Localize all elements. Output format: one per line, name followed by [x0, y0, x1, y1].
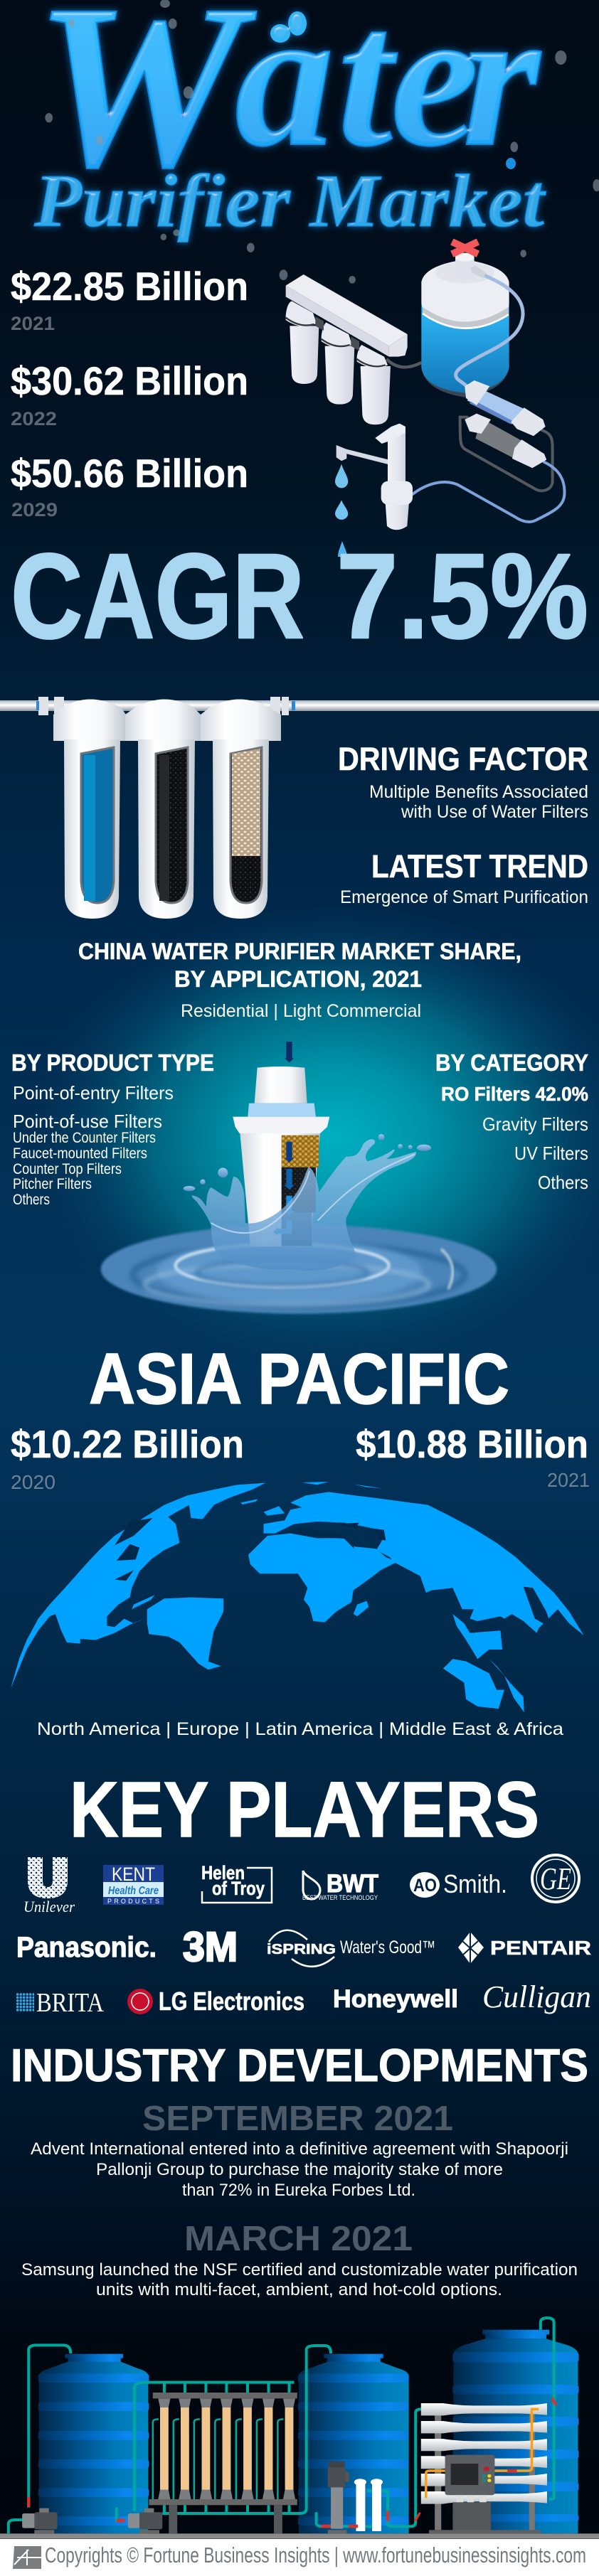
- logo: A.O. Smith: Smith.: [443, 1869, 507, 1898]
- driving factor: with Use of Water Filters: [401, 802, 588, 822]
- by product type list: BY PRODUCT TYPE: [11, 1049, 214, 1076]
- logo: A.O. Smith: [410, 1869, 507, 1898]
- by category list: Gravity Filters: [482, 1113, 588, 1135]
- driving factor: [338, 741, 588, 822]
- china market share heading: Residential | Light Commercial: [181, 1001, 421, 1021]
- development: September 2021: Advent International entered into a definitive agreement with Shapoorji: [31, 2139, 568, 2159]
- title: Water Purifier Market: [33, 0, 599, 284]
- filter heads: [53, 700, 281, 741]
- footer: [0, 2539, 599, 2576]
- logo: Kent Health Care Products: Health Care: [108, 1885, 159, 1897]
- china market share heading: [78, 939, 521, 1021]
- logo: BWT: BEST WATER TECHNOLOGY: [302, 1894, 378, 1901]
- stat: 2022 market size: 2022: [11, 408, 57, 429]
- red valves: [27, 2396, 558, 2528]
- storage tank: [421, 260, 509, 397]
- logo: A.O. Smith: AO: [413, 1876, 437, 1896]
- falling drops: [335, 464, 348, 520]
- water ripple and splash with cartridge: [101, 1042, 497, 1314]
- teal pipework: [9, 2318, 554, 2533]
- logo: Helen of Troy: [201, 1862, 272, 1903]
- stat: 2021 market size: $22.85 Billion: [11, 264, 248, 309]
- mounting bracket: [286, 274, 408, 357]
- three filter tubes: [286, 301, 421, 424]
- stat: 2021 market size: [11, 264, 248, 334]
- development: March 2021: [21, 2220, 578, 2299]
- logo: Pentair: [458, 1932, 591, 1964]
- seas and lakes: [115, 1518, 552, 1633]
- membrane rack: [149, 2393, 297, 2533]
- hoses: [413, 276, 564, 522]
- stat: 2029 market size: [11, 451, 248, 520]
- logo: LG Electronics: LG Electronics: [159, 1987, 304, 2016]
- control panel: [429, 2455, 541, 2533]
- pump left: [22, 2508, 58, 2533]
- logo: iSpring: [267, 1930, 435, 1967]
- by category list: Others: [538, 1172, 588, 1193]
- faucet: [336, 424, 413, 530]
- by product type list: Under the Counter Filters: [13, 1130, 156, 1146]
- logo: Honeywell: Honeywell: [333, 1985, 458, 2013]
- drop on CAGR seven: [338, 541, 347, 557]
- china market share heading: BY APPLICATION, 2021: [174, 966, 422, 992]
- ground: [0, 2533, 599, 2539]
- logo: GE: [532, 1855, 579, 1902]
- driving factor: Multiple Benefits Associated: [369, 782, 588, 802]
- logo: GE: GE: [540, 1861, 571, 1896]
- tank neck: [455, 253, 487, 279]
- red valve: [452, 242, 478, 254]
- asia pacific 2021 value: [356, 1422, 590, 1491]
- filter tube: gravel and carbon: [213, 739, 269, 919]
- asia pacific 2020 value: $10.22 Billion: [11, 1422, 244, 1466]
- illustration: industrial water treatment plant: [0, 2318, 599, 2539]
- development: March 2021: units with multi-facet, ambient, and hot-cold options.: [96, 2280, 502, 2299]
- asia pacific heading: ASIA PACIFIC: [89, 1340, 509, 1419]
- by product type list: [11, 1049, 214, 1208]
- logo: iSpring: Water's Good™: [340, 1938, 435, 1957]
- footer logo: [13, 2546, 41, 2569]
- asia pacific 2020 value: [11, 1422, 244, 1493]
- logo: Culligan: Culligan: [482, 1979, 591, 2014]
- logo: BWT: [302, 1870, 378, 1901]
- asia pacific 2021 value: 2021: [547, 1469, 590, 1491]
- by product type list: Counter Top Filters: [13, 1161, 122, 1177]
- latest trend: [340, 848, 588, 907]
- inline cartridges: [465, 380, 546, 468]
- asia pacific 2020 value: 2020: [11, 1471, 55, 1493]
- stat: 2029 market size: $50.66 Billion: [11, 451, 248, 496]
- by category list: [435, 1049, 588, 1193]
- key players heading: KEY PLAYERS: [70, 1766, 539, 1854]
- logo: Helen of Troy: of Troy: [212, 1878, 265, 1899]
- development: March 2021: Samsung launched the NSF certified and customizable water purification: [21, 2260, 578, 2280]
- logo: Unilever: Unilever: [23, 1898, 75, 1915]
- latest trend: Emergence of Smart Purification: [340, 887, 588, 907]
- title line: Purifier Market: Purifier Market: [33, 159, 547, 242]
- logo: Kent Health Care Products: KENT: [112, 1864, 155, 1885]
- development: September 2021: SEPTEMBER 2021: [142, 2100, 453, 2138]
- by product type list: Others: [13, 1192, 50, 1208]
- development: September 2021: Pallonji Group to purchase the majority stake of more: [96, 2160, 503, 2179]
- logo: Helen of Troy: Helen: [201, 1862, 245, 1883]
- horizontal water pipe: [0, 697, 599, 715]
- logo: Pentair: PENTAIR: [490, 1937, 591, 1959]
- white filter pair: [354, 2479, 383, 2531]
- logo: Unilever: [23, 1857, 75, 1915]
- illustration: home RO water purifier: [286, 242, 564, 530]
- development: September 2021: than 72% in Eureka Forbes Ltd.: [182, 2181, 415, 2200]
- filter tube: blue sediment: [64, 739, 120, 919]
- logo: Kent Health Care Products: PRODUCTS: [107, 1898, 159, 1905]
- thin side pipes: [153, 2419, 283, 2499]
- reverse osmosis rack: [421, 2403, 547, 2530]
- china market share heading: CHINA WATER PURIFIER MARKET SHARE,: [78, 939, 521, 964]
- splash highlight: [211, 1154, 415, 1233]
- stat: 2021 market size: 2021: [11, 313, 55, 334]
- logo: 3M: 3M: [183, 1924, 238, 1970]
- development: September 2021: [31, 2100, 568, 2200]
- stat: 2022 market size: $30.62 Billion: [11, 358, 248, 403]
- by product type list: Pitcher Filters: [13, 1176, 92, 1192]
- CAGR headline: CAGR: [11, 529, 304, 664]
- by category list: UV Filters: [514, 1143, 588, 1164]
- pump right: [128, 2508, 162, 2533]
- logo: Kent Health Care Products: [103, 1864, 164, 1905]
- by product type list: Point-of-entry Filters: [13, 1082, 174, 1103]
- regions list: North America | Europe | Latin America | Middle East & Africa: [37, 1719, 563, 1739]
- stat: 2022 market size: [11, 358, 248, 429]
- logo: iSpring: iSPRING: [267, 1942, 336, 1957]
- stat: 2029 market size: 2029: [11, 499, 58, 520]
- development: March 2021: MARCH 2021: [184, 2220, 413, 2258]
- logo: LG Electronics: [127, 1987, 304, 2016]
- key players logos: [16, 1855, 591, 2018]
- water splash crown: [184, 1134, 431, 1271]
- by category list: RO Filters 42.0%: [441, 1083, 588, 1105]
- world map globe: [11, 1482, 584, 1712]
- vertical pump: [328, 2462, 349, 2533]
- cartridge: arrow: [285, 1042, 294, 1062]
- filter cartridges: three housings: [53, 700, 281, 919]
- filter tube: activated carbon: [138, 739, 195, 919]
- landmasses: [11, 1482, 584, 1712]
- logo: BWT: BWT: [327, 1870, 378, 1898]
- logo: Brita: BRITA: [36, 1988, 104, 2018]
- by product type list: Point-of-use Filters: [13, 1111, 162, 1132]
- storage tank middle: [298, 2354, 409, 2533]
- title bubble: [270, 11, 307, 43]
- CAGR headline: [11, 529, 588, 664]
- logo: Panasonic: Panasonic.: [16, 1932, 157, 1963]
- cartridge body: [233, 1067, 329, 1246]
- storage tank right: [452, 2330, 579, 2533]
- storage tank left: [38, 2354, 149, 2533]
- blue droplet: [506, 158, 516, 169]
- ripple pool: [101, 1224, 497, 1314]
- by product type list: Faucet-mounted Filters: [13, 1145, 147, 1162]
- water droplets around title: [45, 0, 599, 284]
- asia pacific 2021 value: $10.88 Billion: [356, 1422, 588, 1466]
- logo: Brita: [16, 1988, 104, 2018]
